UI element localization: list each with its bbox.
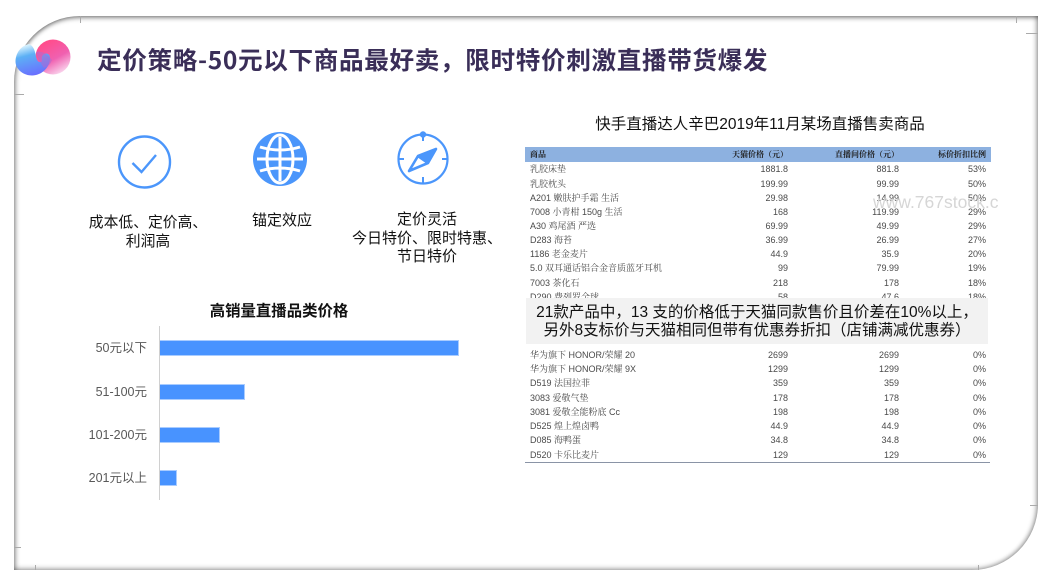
text: factor three: 今日特价、限时特惠、 <box>352 230 502 246</box>
bar: 50元以下 <box>160 340 459 356</box>
table: product prices: 1299 <box>768 364 788 374</box>
table: product prices: 华为旗下 HONOR/荣耀 20 <box>530 350 635 360</box>
table: product prices: A30 鸡尾酒 严选 <box>530 220 596 230</box>
panel: pricing factors <box>89 131 502 265</box>
callout: price summary <box>526 298 988 344</box>
table: product prices: 79.99 <box>876 263 899 273</box>
table: product prices: 7003 茶化石 <box>530 278 580 288</box>
table: product prices: 19% <box>968 263 986 273</box>
title: 定价策略-50元以下商品最好卖，限时特价刺激直播带货爆发 <box>97 41 768 77</box>
table: product prices: 18% <box>968 292 986 302</box>
text: factor one: 利润高 <box>126 234 170 250</box>
table: product prices: 0% <box>973 378 986 388</box>
icon: check circle <box>118 135 172 189</box>
table: product prices: 119.99 <box>872 207 899 217</box>
table: product prices: D283 海苔 <box>530 234 572 244</box>
text: factor three: 节日特价 <box>397 248 457 265</box>
callout: price summary: 21款产品中，13 支的价格低于天猫同款售价且价差在10%以上， <box>536 304 978 321</box>
table: product prices: 178 <box>773 392 788 402</box>
table: product prices: 1186 老金麦片 <box>530 249 588 259</box>
table header: 商品 <box>530 149 546 160</box>
table: product prices: 36.99 <box>765 234 788 244</box>
label: 101-200元: 101-200元 <box>89 428 147 442</box>
table: product prices: D290 费列罗全球 <box>530 292 599 302</box>
table: product prices: 29% <box>968 220 986 230</box>
table: product prices: 1299 <box>879 364 899 374</box>
table: product prices: 50% <box>968 192 986 202</box>
table: product prices: 0% <box>973 421 986 431</box>
table: product prices: 168 <box>773 207 788 217</box>
table: product prices: 华为旗下 HONOR/荣耀 9X <box>530 364 636 374</box>
table: product prices: 44.9 <box>770 249 788 259</box>
table: product prices: 2699 <box>768 350 788 360</box>
table: product prices: 29.98 <box>765 192 788 202</box>
table: product prices: 14.99 <box>876 192 899 202</box>
table: product prices: 18% <box>968 278 986 288</box>
text: factor one: 成本低、定价高、 <box>89 215 207 231</box>
table: product prices: 881.8 <box>876 164 899 174</box>
text: factor three <box>352 211 502 265</box>
bar: 201元以上 <box>160 470 177 486</box>
table: product prices: D520 卡乐比麦片 <box>530 450 599 460</box>
table: product prices: 47.6 <box>881 292 899 302</box>
chart: best-selling live price bands <box>89 302 459 500</box>
table: product prices: 69.99 <box>765 220 788 230</box>
table: product prices: 3081 爱敬全能粉底 Cc <box>530 407 620 417</box>
table: product prices: 218 <box>773 278 788 288</box>
table: product prices: 49.99 <box>876 220 899 230</box>
table: product prices: 0% <box>973 450 986 460</box>
table: product prices: 27% <box>968 234 986 244</box>
table: product prices: 1881.8 <box>760 164 788 174</box>
table: product prices: 199.99 <box>760 178 788 188</box>
callout: price summary: 另外8支标价与天猫相同但带有优惠券折扣（店铺满减优惠券） <box>543 322 971 339</box>
table: product prices: 99.99 <box>876 178 899 188</box>
text: factor two: 锚定效应 <box>252 212 312 229</box>
table: product prices: 3083 爱敬气垫 <box>530 392 589 402</box>
table: product prices: 0% <box>973 364 986 374</box>
table: product prices: 2699 <box>879 350 899 360</box>
table: product prices: 178 <box>884 392 899 402</box>
table: product prices: 0% <box>973 435 986 445</box>
table: product prices: D085 海鸭蛋 <box>530 435 581 445</box>
table: product prices: 20% <box>968 249 986 259</box>
icon: compass <box>397 131 449 185</box>
table: product prices: 178 <box>884 278 899 288</box>
table header: 天猫价格（元） <box>732 149 788 160</box>
table: product prices: 乳胶床垫 <box>530 164 566 174</box>
table: product prices: 0% <box>973 350 986 360</box>
chart title: 高销量直播品类价格 <box>210 303 348 320</box>
table: product prices: 0% <box>973 392 986 402</box>
table: product prices: 44.9 <box>770 421 788 431</box>
chart axis <box>159 326 160 500</box>
watermark: www.767stock.c <box>873 192 998 212</box>
table: product prices: 359 <box>773 378 788 388</box>
table: product prices: 35.9 <box>881 249 899 259</box>
table: product prices: 359 <box>884 378 899 388</box>
table header: 标价折扣比例 <box>938 149 986 160</box>
bar: 51-100元 <box>160 384 245 400</box>
icon: globe <box>253 132 307 186</box>
table: product prices: A201 嫩肤护手霜 生活 <box>530 192 619 202</box>
table: product prices: 7008 小青柑 150g 生活 <box>530 207 623 217</box>
table: product prices: D519 法国拉菲 <box>530 378 590 388</box>
table: product prices: D525 煌上煌卤鸭 <box>530 421 599 431</box>
table: product prices: 乳胶枕头 <box>530 178 566 188</box>
label: 51-100元: 51-100元 <box>96 384 147 398</box>
heading: table title: 快手直播达人辛巴2019年11月某场直播售卖商品 <box>595 116 925 133</box>
table: product prices: 0% <box>973 407 986 417</box>
table: product prices: 5.0 双耳通话铝合金音质蓝牙耳机 <box>530 263 662 273</box>
table: product prices: 198 <box>773 407 788 417</box>
table: product prices: 29% <box>968 207 986 217</box>
text: factor one <box>89 214 207 250</box>
table: product prices: 198 <box>884 407 899 417</box>
label: 50元以下: 50元以下 <box>96 341 147 355</box>
table: product prices: 99 <box>778 263 788 273</box>
table: product prices: 34.8 <box>881 435 899 445</box>
table: product prices: 26.99 <box>876 234 899 244</box>
table: product prices: 53% <box>968 164 986 174</box>
icon: gradient logo <box>16 40 70 76</box>
table: product prices: 129 <box>773 450 788 460</box>
table: product prices: 44.9 <box>881 421 899 431</box>
table: product prices: 58 <box>778 292 788 302</box>
text: factor three: 定价灵活 <box>397 211 457 228</box>
table header: 直播间价格（元） <box>835 149 899 160</box>
table: product prices: 129 <box>884 450 899 460</box>
table: product prices: 34.8 <box>770 435 788 445</box>
table: product prices: 50% <box>968 178 986 188</box>
bar: 101-200元 <box>160 427 220 443</box>
table header <box>525 147 991 162</box>
label: 201元以上: 201元以上 <box>89 471 147 485</box>
